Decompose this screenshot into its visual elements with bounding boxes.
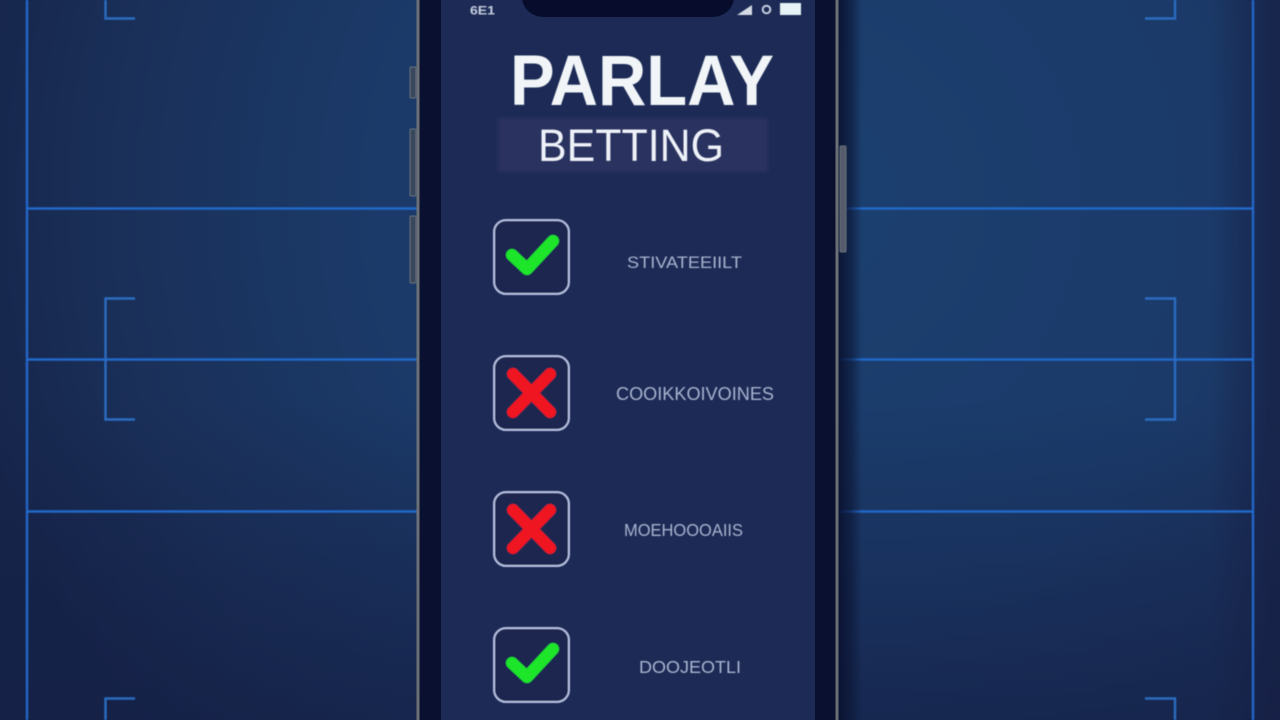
- battery icon: [780, 3, 801, 15]
- blueprint grid: right side: [840, 0, 1253, 720]
- subtitle panel: [498, 118, 768, 172]
- list row 1: [494, 220, 742, 294]
- label: MOEHOOOAIIS: [624, 520, 743, 540]
- list row 4: [494, 628, 741, 702]
- label: DOOJEOTLI: [639, 657, 741, 677]
- wifi icon: [763, 6, 770, 13]
- side buttons: [410, 67, 846, 283]
- label: COOIKKOIVOINES: [616, 384, 774, 404]
- status time: 6E1: [470, 6, 496, 18]
- phone frame: [416, 0, 838, 720]
- checkbox: check: [494, 220, 569, 294]
- corner brackets: left side: [106, 0, 135, 720]
- phone: [410, 0, 862, 720]
- corner brackets: right side: [1145, 0, 1175, 720]
- checkbox: cross: [494, 492, 569, 566]
- signal icon: [737, 5, 752, 15]
- subtitle: BETTING: [538, 120, 724, 171]
- status bar: [470, 3, 801, 18]
- list row 2: [494, 356, 774, 430]
- title: PARLAY: [510, 42, 774, 121]
- phone screen: [441, 0, 815, 720]
- label: STIVATEEIILT: [627, 253, 742, 272]
- list row 3: [494, 492, 743, 566]
- checkbox: check: [494, 628, 569, 702]
- blueprint grid: left side: [27, 0, 418, 720]
- phone shadow: [838, 0, 862, 720]
- notch: [522, 0, 734, 17]
- checkbox: cross: [494, 356, 569, 430]
